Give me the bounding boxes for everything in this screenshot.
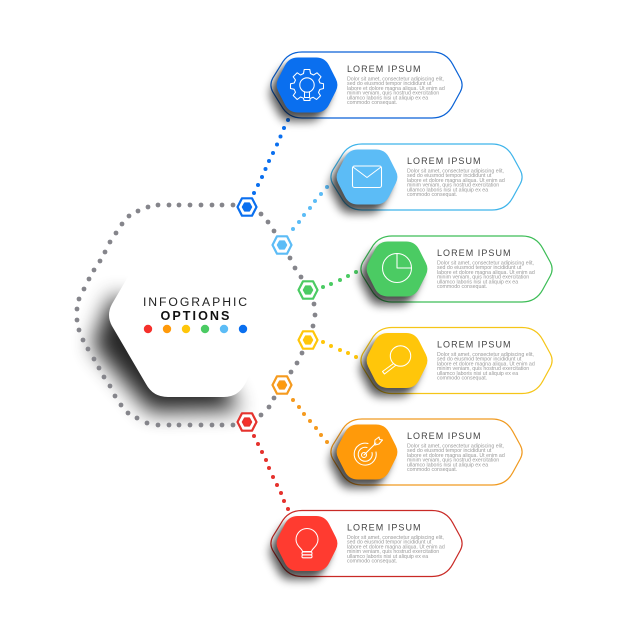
body text: ullamco laboris nisi ut aliquip ex ea [347, 95, 428, 101]
body text: minim veniam, quis nostrud exercitation [407, 458, 499, 464]
icon: target with arrow [354, 437, 382, 465]
heading: LOREM IPSUM [437, 340, 512, 350]
heading: LOREM IPSUM [407, 156, 482, 166]
body text: Dolor sit amet, consectetur adipiscing elit, [407, 444, 504, 450]
icon: envelope [352, 166, 382, 188]
body text: labore et dolore magna aliqua. Ut enim ad [407, 453, 505, 459]
body text: labore et dolore magna aliqua. Ut enim ad [347, 544, 445, 550]
node: green [298, 281, 318, 299]
body text: ullamco laboris nisi ut aliquip ex ea [407, 462, 488, 468]
central hexagon shadow [92, 296, 240, 412]
body text: ullamco laboris nisi ut aliquip ex ea [347, 554, 428, 560]
body text: ullamco laboris nisi ut aliquip ex ea [437, 371, 518, 377]
body text: Dolor sit amet, consectetur adipiscing elit, [437, 352, 534, 358]
card 6: idea [270, 510, 462, 580]
body text: Dolor sit amet, consectetur adipiscing elit, [347, 76, 444, 82]
body text: commodo consequat. [347, 558, 397, 564]
icon: pie chart [382, 254, 412, 282]
body text: labore et dolore magna aliqua. Ut enim ad [407, 178, 505, 184]
node: yellow [298, 331, 318, 349]
card 1: settings [270, 52, 462, 122]
body text: sed do eiusmod tempor incididunt ut [347, 81, 432, 87]
heading: LOREM IPSUM [407, 431, 482, 441]
body text: sed do eiusmod tempor incididunt ut [437, 265, 522, 271]
icon: light bulb [296, 528, 318, 558]
central title: OPTIONS [160, 309, 232, 323]
body text: minim veniam, quis nostrud exercitation [437, 275, 529, 281]
colour dots legend [144, 325, 247, 333]
body text: Dolor sit amet, consectetur adipiscing elit, [407, 168, 504, 174]
connector: red [252, 434, 290, 511]
body text: minim veniam, quis nostrud exercitation [437, 366, 529, 372]
body text: Dolor sit amet, consectetur adipiscing elit, [347, 535, 444, 541]
body text: sed do eiusmod tempor incididunt ut [437, 357, 522, 363]
body text: commodo consequat. [437, 376, 487, 382]
body text: labore et dolore magna aliqua. Ut enim ad [437, 270, 535, 276]
central title [143, 295, 249, 323]
card 2: mail [330, 144, 522, 214]
body text: commodo consequat. [437, 284, 487, 290]
body text: ullamco laboris nisi ut aliquip ex ea [437, 279, 518, 285]
central hexagon panel [109, 233, 277, 397]
connector: orange [291, 398, 329, 444]
body text: minim veniam, quis nostrud exercitation [347, 91, 439, 97]
body text: commodo consequat. [407, 467, 457, 473]
heading: LOREM IPSUM [437, 248, 512, 258]
connector: light blue [291, 185, 329, 231]
heading: LOREM IPSUM [347, 64, 422, 74]
body text: labore et dolore magna aliqua. Ut enim ad [347, 86, 445, 92]
card 4: search [360, 328, 552, 397]
connector: yellow [321, 340, 358, 359]
node: orange [272, 376, 292, 394]
body text: commodo consequat. [407, 192, 457, 198]
node: light blue [272, 236, 292, 254]
node: red [238, 413, 256, 431]
connector: blue [252, 118, 290, 195]
body text: labore et dolore magna aliqua. Ut enim ad [437, 361, 535, 367]
heading: LOREM IPSUM [347, 522, 422, 532]
card 3: chart [360, 236, 552, 306]
connector: green [321, 270, 358, 289]
body text: minim veniam, quis nostrud exercitation [407, 183, 499, 189]
body text: sed do eiusmod tempor incididunt ut [347, 540, 432, 546]
body text: sed do eiusmod tempor incididunt ut [407, 173, 492, 179]
body text: sed do eiusmod tempor incididunt ut [407, 448, 492, 454]
card 5: target [330, 419, 522, 488]
body text: ullamco laboris nisi ut aliquip ex ea [407, 187, 488, 193]
icon: gear [290, 70, 324, 100]
body text: Dolor sit amet, consectetur adipiscing elit, [437, 260, 534, 266]
body text: minim veniam, quis nostrud exercitation [347, 549, 439, 555]
body text: commodo consequat. [347, 100, 397, 106]
icon: magnifier [382, 346, 411, 374]
dotted ring [75, 203, 317, 427]
node: blue [238, 198, 256, 216]
central title: INFOGRAPHIC [143, 295, 249, 309]
